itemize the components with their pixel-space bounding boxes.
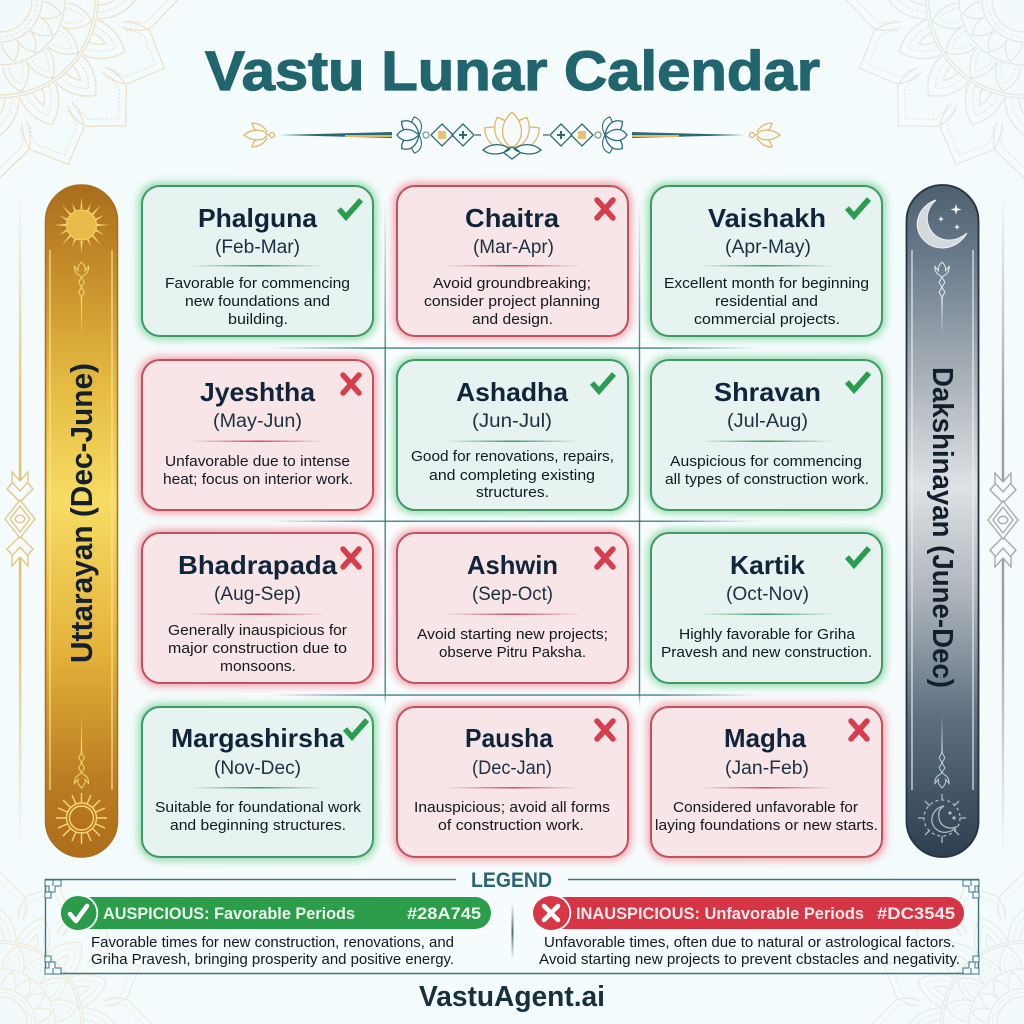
ornament: bottom needle <box>935 714 949 788</box>
description: Highly favorable for Griha <box>679 627 856 643</box>
legend item: auspicious: Favorable times for new construction, renovations, and <box>91 935 454 951</box>
description: Generally inauspicious for <box>168 623 347 639</box>
description: and completing existing <box>429 468 595 484</box>
description <box>411 449 614 501</box>
icon: check <box>847 373 869 390</box>
date range: (Nov-Dec) <box>214 758 301 779</box>
description <box>414 800 610 834</box>
decorative mandala: bottom right <box>873 873 1024 1024</box>
date range: (Jun-Jul) <box>472 411 552 432</box>
description: of construction work. <box>438 818 584 834</box>
description: Excellent month for beginning <box>664 276 869 292</box>
card: Ashadha <box>394 357 631 513</box>
icon: check <box>847 199 869 216</box>
month name: Kartik <box>730 550 806 580</box>
description: observe Pitru Paksha. <box>439 645 586 661</box>
description: Avoid groundbreaking; <box>433 276 591 292</box>
legend item: inauspicious <box>533 896 964 968</box>
description: building. <box>228 312 288 328</box>
date range: (Oct-Nov) <box>726 584 809 605</box>
card: Margashirsha <box>139 704 376 860</box>
description: structures. <box>476 485 549 501</box>
date range: (Mar-Apr) <box>473 237 554 258</box>
card: Chaitra <box>394 183 631 339</box>
left rail: Uttarayan <box>46 185 118 857</box>
description: Auspicious for commencing <box>670 454 862 470</box>
legend item: inauspicious: #DC3545 <box>877 905 955 923</box>
icon: cross <box>851 721 867 739</box>
card: Shravan <box>648 357 885 513</box>
title ornament: lotus divider <box>244 112 780 159</box>
description: Pravesh and new construction. <box>661 645 872 661</box>
rail label: Uttarayan (Dec-June) <box>64 363 99 663</box>
description: new foundations and <box>185 294 330 310</box>
legend item: auspicious: AUSPICIOUS: Favorable Periods <box>103 905 355 923</box>
month name: Pausha <box>465 723 553 753</box>
ornament: top needle <box>74 262 89 336</box>
month name: Vaishakh <box>708 203 826 233</box>
month name: Shravan <box>714 377 821 407</box>
description <box>168 623 347 675</box>
date range: (Sep-Oct) <box>472 584 553 605</box>
description: major construction due to <box>168 641 347 657</box>
description <box>665 454 869 488</box>
icon: cross <box>343 549 359 567</box>
card: Bhadrapada <box>139 530 376 686</box>
side ornament: left gold line <box>5 190 35 850</box>
icon: cross <box>597 200 613 218</box>
legend item: inauspicious: Unfavorable times, often due to natural or astrological factors. <box>544 935 955 951</box>
icon: check <box>339 200 361 217</box>
description: Suitable for foundational work <box>155 800 362 816</box>
description: consider project planning <box>424 294 600 310</box>
description <box>163 454 353 488</box>
month name: Margashirsha <box>171 723 345 753</box>
card: Pausha <box>394 704 631 860</box>
description: Good for renovations, repairs, <box>411 449 614 465</box>
icon: check <box>592 374 614 391</box>
description: residential and <box>715 294 818 310</box>
description <box>155 800 362 834</box>
card: Jyeshtha <box>139 357 376 513</box>
legend item: inauspicious: Avoid starting new projects to prevent cbstacles and negativity. <box>539 952 960 968</box>
date range: (May-Jun) <box>213 411 302 432</box>
icon: cross <box>597 549 613 567</box>
icon: sun top <box>54 197 109 253</box>
decorative mandala: top left <box>0 0 178 178</box>
description: Considered unfavorable for <box>673 800 858 816</box>
icon: check <box>847 548 869 565</box>
month name: Chaitra <box>465 203 560 233</box>
ornament: top needle <box>935 262 949 336</box>
date range: (Apr-May) <box>725 237 811 258</box>
icon: cross <box>597 721 613 739</box>
legend item: auspicious <box>61 896 491 968</box>
icon: sun bottom <box>56 793 107 844</box>
right rail: Dakshinayan <box>906 185 978 857</box>
description: laying foundations or new starts. <box>655 818 878 834</box>
legend heading: LEGEND <box>471 869 552 892</box>
month name: Ashadha <box>456 377 569 407</box>
card: Vaishakh <box>648 183 885 339</box>
month name: Bhadrapada <box>178 550 338 580</box>
icon: moon emblem bottom <box>918 794 966 843</box>
date range: (Jul-Aug) <box>727 411 808 432</box>
legend panel <box>45 869 979 974</box>
description: Unfavorable due to intense <box>165 454 350 470</box>
description: heat; focus on interior work. <box>163 472 353 488</box>
description: and beginning structures. <box>170 818 346 834</box>
description <box>655 800 878 834</box>
description: all types of construction work. <box>665 472 869 488</box>
legend frame <box>46 880 978 974</box>
month name: Jyeshtha <box>200 377 316 407</box>
description: and design. <box>472 312 553 328</box>
icon: check <box>345 720 367 737</box>
card: Phalguna <box>139 183 376 339</box>
legend item: auspicious: #28A745 <box>407 905 481 923</box>
title: Vastu Lunar Calendar <box>205 39 820 102</box>
date range: (Aug-Sep) <box>214 584 301 605</box>
month name: Magha <box>724 723 807 753</box>
description: commercial projects. <box>694 312 840 328</box>
icon: cross <box>343 375 359 393</box>
description: Inauspicious; avoid all forms <box>414 800 610 816</box>
icon: crescent and stars <box>917 200 967 248</box>
description <box>661 627 872 661</box>
description: Favorable for commencing <box>165 276 350 292</box>
card: Ashwin <box>394 530 631 686</box>
description: monsoons. <box>220 659 296 675</box>
description <box>424 276 600 328</box>
ornament: bottom needle <box>74 714 89 788</box>
side ornament: right silver line <box>988 195 1018 850</box>
grid lines between cards <box>270 200 760 706</box>
description <box>165 276 350 328</box>
decorative mandala: bottom left <box>0 873 151 1024</box>
rail label: Dakshinayan (June-Dec) <box>926 367 958 688</box>
legend item: inauspicious: INAUSPICIOUS: Unfavorable Periods <box>576 905 864 923</box>
date range: (Feb-Mar) <box>215 237 300 258</box>
card: Kartik <box>648 530 885 686</box>
date range: (Dec-Jan) <box>472 758 552 779</box>
month name: Phalguna <box>198 203 318 233</box>
description <box>664 276 869 328</box>
month name: Ashwin <box>467 550 558 580</box>
description: Avoid starting new projects; <box>417 627 608 643</box>
description <box>417 627 608 661</box>
card: Magha <box>648 704 885 860</box>
decorative mandala: top right <box>846 0 1024 178</box>
legend item: auspicious: Griha Pravesh, bringing prosperity and positive energy. <box>91 952 454 968</box>
footer brand: VastuAgent.ai <box>419 981 605 1013</box>
date range: (Jan-Feb) <box>725 758 809 779</box>
